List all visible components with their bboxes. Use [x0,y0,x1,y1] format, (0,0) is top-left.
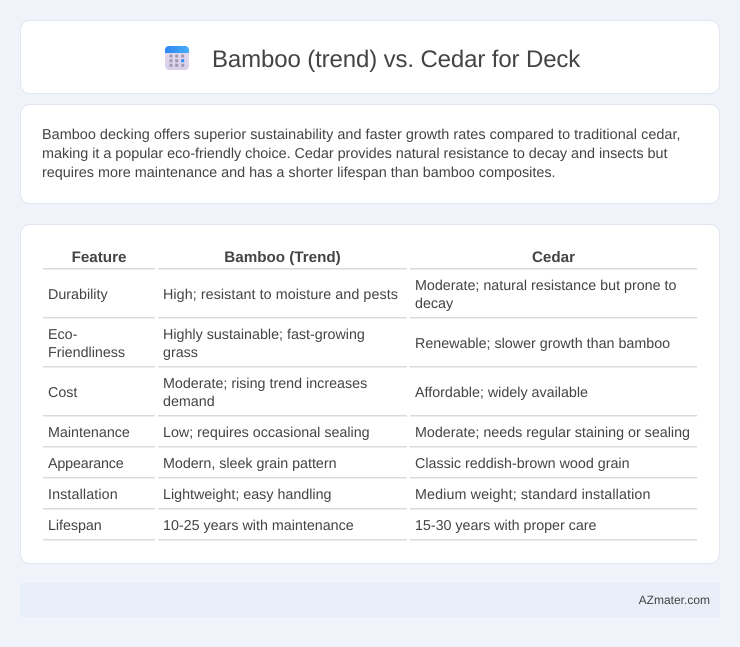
intro paragraph: Bamboo decking offers superior sustainability and faster growth rates compared to traditional cedar, [42,127,681,143]
row: cost [48,376,588,410]
row: eco-friendliness: Eco- [48,327,77,343]
footer credit: AZmater.com [639,593,710,607]
title: Bamboo (trend) vs. Cedar for Deck [212,46,580,73]
row: cost: Affordable; widely available [415,385,588,401]
table header row: Cedar [532,249,575,266]
row: installation: Lightweight; easy handling [163,487,332,503]
row: lifespan: Lifespan [48,518,102,534]
row: durability: decay [415,296,453,312]
row: appearance: Appearance [48,456,124,472]
row: maintenance [48,425,690,441]
row: maintenance: Low; requires occasional sealing [163,425,370,441]
intro paragraph [42,127,681,181]
intro paragraph: requires more maintenance and has a shorter lifespan than bamboo composites. [42,165,556,181]
row: eco-friendliness: Friendliness [48,345,125,361]
row: eco-friendliness: Renewable; slower growth than bamboo [415,336,670,352]
panel: title card [20,20,720,94]
row: lifespan [48,518,596,534]
row: eco-friendliness: Highly sustainable; fast-growing [163,327,365,343]
icon: calendar [165,46,189,70]
row: maintenance: Maintenance [48,425,130,441]
row: installation [48,487,651,503]
row: durability: High; resistant to moisture and pests [163,287,398,303]
row: cost: Moderate; rising trend increases [163,376,367,392]
row: lifespan: 15-30 years with proper care [415,518,596,534]
row: appearance: Classic reddish-brown wood grain [415,456,630,472]
table header row: Bamboo (Trend) [224,249,341,266]
panel: intro text [20,104,720,204]
row: maintenance: Moderate; needs regular staining or sealing [415,425,690,441]
row: eco-friendliness: grass [163,345,198,361]
panel: comparison table [20,224,720,564]
row: cost: Cost [48,385,77,401]
row: cost: demand [163,394,215,410]
row: durability: Moderate; natural resistance but prone to [415,278,676,294]
row: installation: Medium weight; standard installation [415,487,651,503]
row: appearance: Modern, sleek grain pattern [163,456,337,472]
table header row [72,249,575,266]
footer bar [20,583,720,617]
table header row: Feature [72,249,126,266]
row: durability: Durability [48,287,108,303]
row: eco-friendliness [48,327,670,361]
row: durability [48,278,676,312]
row: installation: Installation [48,487,118,503]
row: lifespan: 10-25 years with maintenance [163,518,354,534]
intro paragraph: making it a popular eco-friendly choice. Cedar provides natural resistance to decay and insects but [42,146,667,162]
row: appearance [48,456,630,472]
